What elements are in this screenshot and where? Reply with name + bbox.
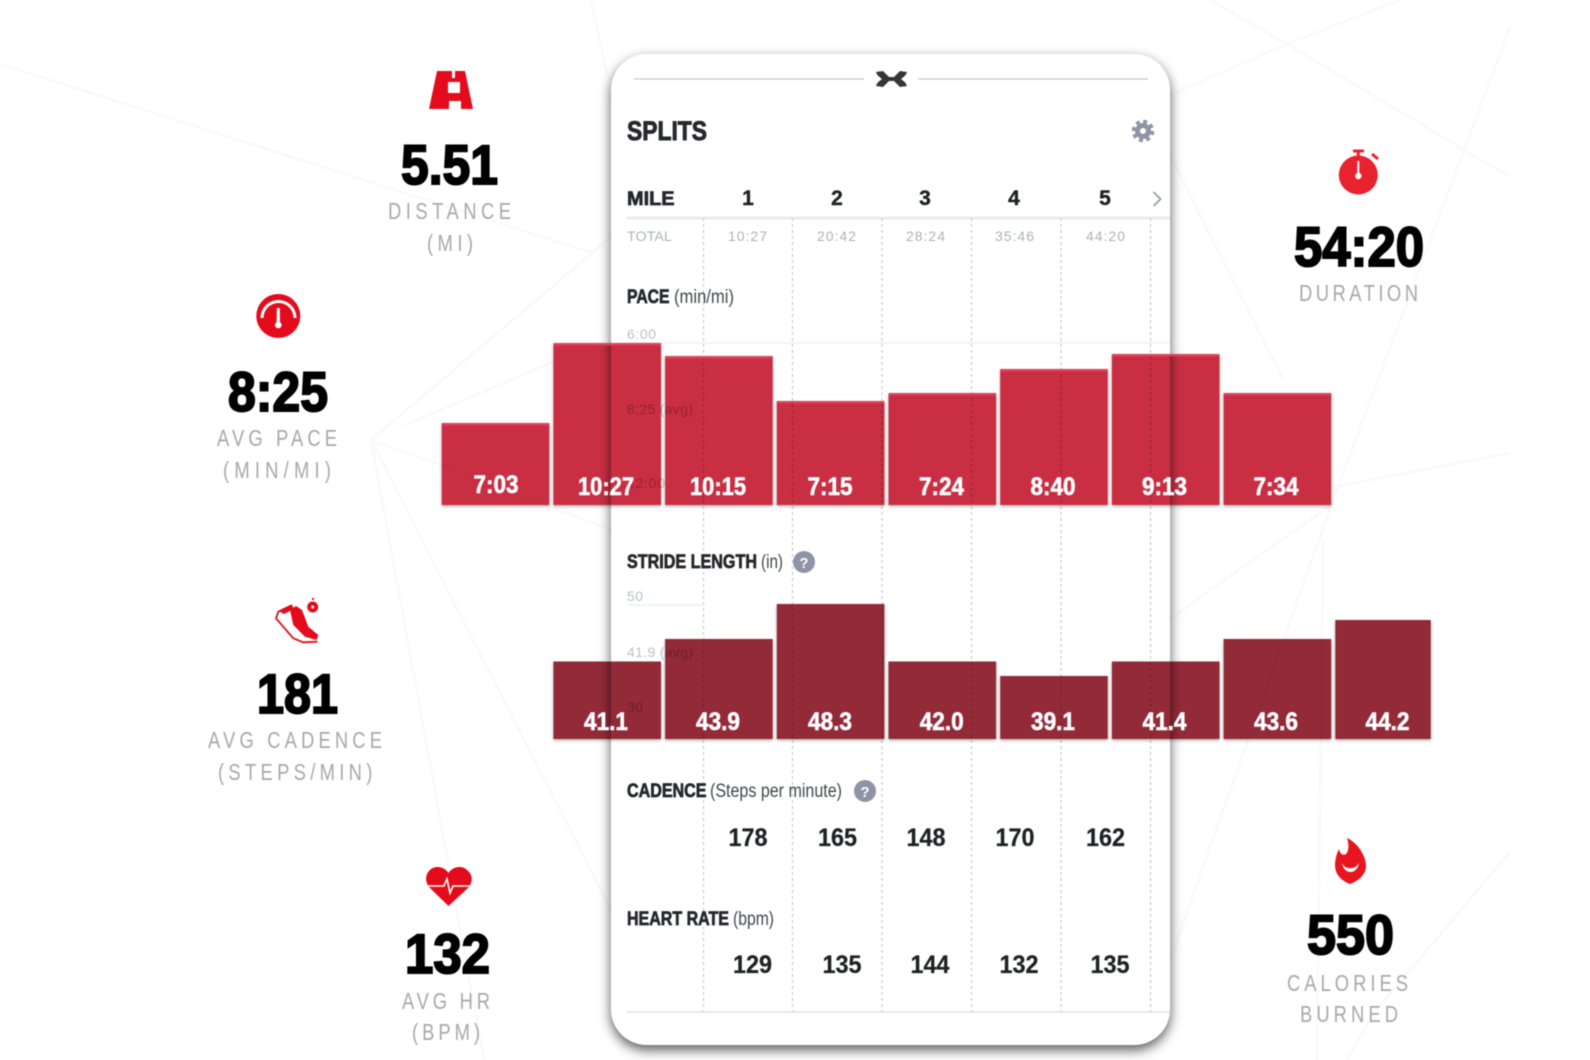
icon: stride help: ? [799, 555, 809, 572]
calories label: CALORIES [1287, 971, 1408, 997]
row: total times [627, 228, 1125, 244]
row: cadence values: 178 [728, 824, 768, 852]
pace value: 8:25 [228, 360, 328, 423]
icon: running shoe [276, 598, 318, 642]
table header: miles [627, 187, 1111, 210]
bar chart: pace: 8:40 [1030, 473, 1076, 501]
row: total times: 44:20 [1086, 228, 1125, 244]
row: total times: 20:42 [817, 228, 856, 244]
heading: cadence [627, 781, 842, 802]
stat: calories [1287, 838, 1408, 1028]
pace unit: (MIN/MI) [223, 458, 331, 484]
calories value: 550 [1307, 903, 1394, 966]
bar chart: pace: 7:34 [1254, 473, 1299, 501]
calories label line two: BURNED [1300, 1002, 1398, 1028]
icon: cadence help: ? [860, 784, 870, 801]
row: cadence values: 165 [818, 824, 857, 852]
pace axis labels [627, 326, 693, 491]
bar chart: pace: 7:15 [808, 473, 853, 501]
pace label: AVG PACE [217, 426, 337, 452]
heading: stride length: (in) [761, 552, 783, 573]
bar chart: pace: 7:24 [919, 473, 964, 501]
heading: pace [627, 287, 734, 308]
row: total times: 35:46 [995, 228, 1034, 244]
row: total times: 10:27 [728, 228, 767, 244]
pace axis labels: 8:25 (avg) [627, 401, 693, 417]
icon: flame [1335, 838, 1366, 884]
row: cadence values: 162 [1086, 824, 1125, 852]
table header: miles: 4 [1008, 187, 1020, 210]
bar chart: stride length: 43.9 [696, 708, 740, 736]
cadence unit: (STEPS/MIN) [218, 760, 372, 786]
row: heart rate values: 132 [1000, 951, 1038, 979]
bar chart: stride length: 48.3 [808, 708, 852, 736]
heading: heart rate: HEART RATE [627, 909, 729, 930]
icon: gauge [256, 294, 300, 338]
table header: miles: 2 [831, 187, 843, 210]
bar chart: pace [442, 343, 1331, 505]
bar chart: pace: 10:27 [578, 473, 634, 501]
bar chart: pace: 9:13 [1142, 473, 1187, 501]
row: total times: TOTAL [627, 228, 672, 244]
stat: average heart rate [402, 867, 490, 1046]
distance value: 5.51 [401, 133, 498, 196]
bar chart: stride length [553, 604, 1431, 739]
stride axis labels [627, 588, 693, 715]
row: heart rate values [733, 951, 1130, 979]
distance unit: (MI) [427, 231, 473, 257]
table header: miles: 5 [1099, 187, 1111, 210]
icon: next chevron [1154, 192, 1160, 206]
stat: average pace [217, 294, 337, 484]
heart rate unit: (BPM) [412, 1020, 480, 1046]
bar chart: pace: 10:15 [690, 473, 746, 501]
icon: settings gear [1134, 122, 1152, 140]
card background [611, 54, 1170, 1045]
heart rate value: 132 [405, 922, 490, 985]
heading: cadence: (Steps per minute) [710, 781, 842, 802]
stat: average cadence [208, 598, 382, 786]
table header: miles: MILE [627, 189, 674, 210]
row: cadence values [728, 824, 1125, 852]
pace axis labels: 12:00 [627, 475, 665, 491]
bar chart: stride length: 42.0 [920, 708, 964, 736]
row: heart rate values: 135 [1090, 951, 1130, 979]
cadence value: 181 [257, 662, 338, 725]
pace axis labels: 6:00 [627, 326, 656, 342]
icon: brand logo [876, 71, 907, 87]
heading: splits: SPLITS [627, 116, 707, 146]
icon: cadence help [854, 780, 876, 802]
bar chart: pace: 7:03 [474, 471, 518, 499]
heart rate label: AVG HR [402, 989, 490, 1015]
row: cadence values: 170 [996, 824, 1034, 852]
table header: miles: 1 [742, 187, 754, 210]
row: heart rate values: 129 [733, 951, 772, 979]
cadence label: AVG CADENCE [208, 728, 382, 754]
bar chart: stride length: 39.1 [1031, 708, 1075, 736]
bar chart: stride length: 41.1 [584, 708, 628, 736]
icon: stride help [793, 551, 815, 573]
icon: road [429, 71, 473, 109]
stride axis labels: 41.9 (avg) [627, 644, 693, 660]
panel: phone card [611, 54, 1170, 1045]
stat: duration [1294, 150, 1424, 307]
heading: pace: PACE [627, 287, 670, 308]
row: total times: 28:24 [906, 228, 945, 244]
heading: pace: (min/mi) [674, 287, 734, 308]
bar chart: stride length: 41.4 [1142, 708, 1187, 736]
heading: stride length: STRIDE LENGTH [627, 552, 757, 573]
row: heart rate values: 135 [822, 951, 862, 979]
icon: stopwatch [1339, 150, 1378, 194]
duration label: DURATION [1299, 281, 1418, 307]
heading: heart rate: (bpm) [733, 909, 774, 930]
row: heart rate values: 144 [910, 951, 950, 979]
row: cadence values: 148 [906, 824, 946, 852]
stride axis labels: 30 [627, 699, 643, 715]
bar chart: stride length: 44.2 [1366, 708, 1410, 736]
bar chart: stride length: 43.6 [1254, 708, 1298, 736]
stat: distance [388, 71, 511, 257]
duration value: 54:20 [1294, 215, 1424, 278]
table header: miles: 3 [919, 187, 931, 210]
distance label: DISTANCE [388, 199, 511, 225]
heading: cadence: CADENCE [627, 781, 706, 802]
stride axis labels: 50 [627, 588, 643, 604]
icon: heart [426, 867, 472, 906]
